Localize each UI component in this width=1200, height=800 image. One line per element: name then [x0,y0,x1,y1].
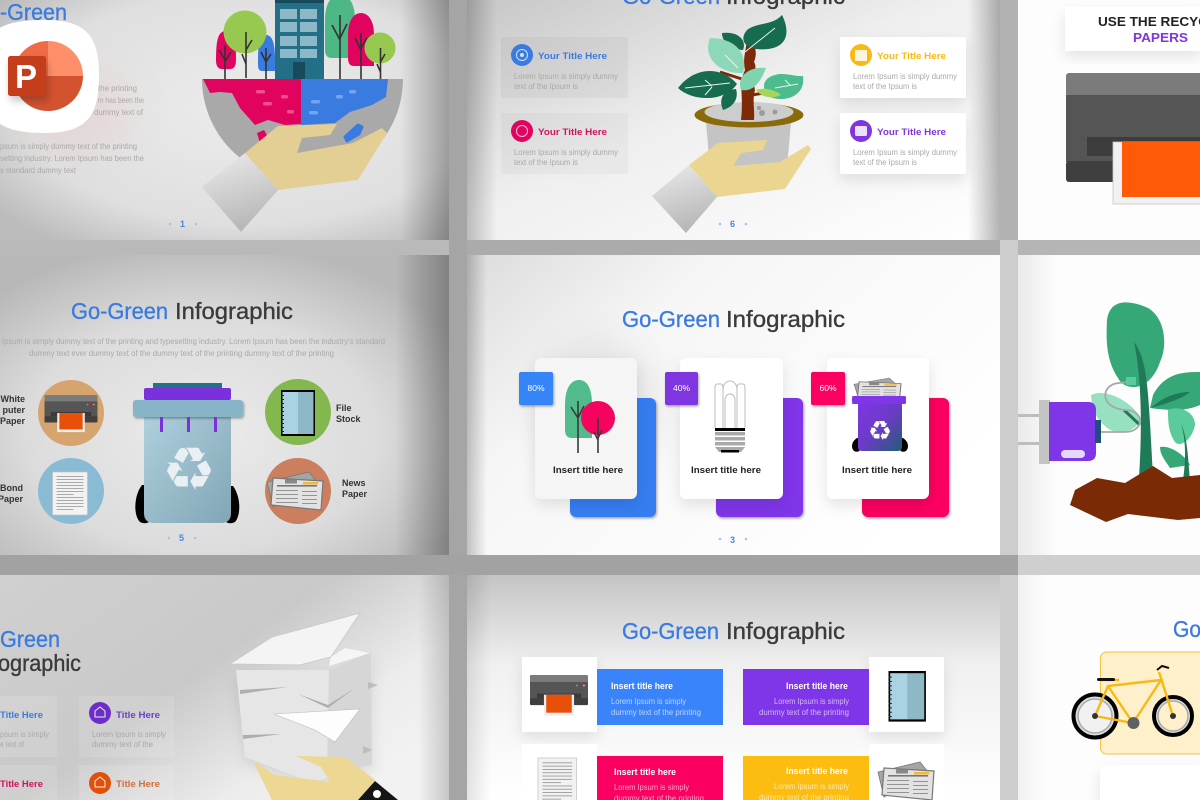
item: bond paper [0,458,104,524]
heading: Infographic [726,618,845,644]
panel: slide 3 percentage cards [467,255,1000,555]
card: blue title: e text of [0,740,25,749]
hand [689,140,811,197]
leaves [743,15,786,49]
card: purple title [840,113,966,174]
item: computer paper with printer [0,380,104,446]
item: computer paper with printer: puter [2,405,25,415]
block: newspaper, yellow: Lorem Ipsum is simply [774,782,849,791]
block: document, pink [522,744,723,800]
icon: printer [1066,73,1200,204]
card: blue title: Lorem Ipsum is simply dummy [514,72,618,81]
panel: slide 1 globe in hand [0,0,449,240]
item: file stock [265,379,362,445]
block: document, pink: Insert title here [614,767,676,777]
panel: right plant and plug slide [1018,255,1200,555]
heading: Green [0,626,60,652]
callout: recycled papers heading [1065,7,1200,51]
card: 40 percent: 40% [673,383,690,393]
heading: ographic [0,650,81,676]
pot [694,102,804,168]
block: notebook, purple: dummy text of the printing [759,708,849,717]
card: 80 percent: Insert title here [553,465,623,476]
body text: setting industry. Lorem Ipsum has been the [0,154,145,163]
card: blue title: text of the Ipsum is [514,82,578,91]
icon: purple bin with newspapers: ♻ [868,416,892,447]
card: yellow title: Lorem Ipsum is simply dummy [853,72,957,81]
card: pink title: Your Title Here [538,127,607,138]
block: notebook, purple [743,657,944,732]
card: 80 percent: 80% [527,383,545,393]
body text [0,84,145,175]
card: purple title: dummy text of the [92,740,154,749]
panel: slide 5 recycling bin [0,255,449,555]
card: pink title [0,765,57,800]
heading [622,618,845,644]
bin with recycle symbol: ♻ [162,435,216,505]
illustration: potted plant in hand [652,15,811,233]
body text: m has been the [98,96,144,105]
icon: trees [565,380,615,453]
card: yellow title: text of the Ipsum is [853,82,917,91]
card: blue title: Your Title Here [538,51,607,62]
card: purple title: Your Title Here [877,127,946,138]
page number: 1 [180,219,185,229]
icon: bicycle [1074,666,1192,738]
card: pink title: Lorem Ipsum is simply dummy [514,148,618,157]
card: yellow title: Your Title Here [877,51,946,62]
block: document, pink: Lorem Ipsum is simply [614,783,689,792]
callout: recycled papers heading: PAPERS [1133,30,1188,45]
heading: Go-Green [622,618,719,644]
page number: 5 [179,533,184,543]
item: news paper [265,458,368,524]
white card [1100,765,1200,800]
icon: purple bin with newspapers [852,378,908,452]
card: purple title: Lorem Ipsum is simply [92,730,166,739]
card: purple title [79,696,174,757]
page number [719,219,747,229]
globe [202,79,403,180]
panel: bottom-left paper stack slide [0,575,449,800]
heading [71,298,293,324]
heading: Infographic [726,306,845,332]
card: orange title: Title Here [116,779,160,790]
card: blue title: psum is simply [0,730,49,739]
block: printer, blue: Insert title here [611,681,673,691]
page number [719,535,747,545]
sleeve [202,153,278,232]
hand [245,124,387,190]
heading: Go-Green [622,306,720,332]
card: 60 percent [811,358,949,517]
card: pink title: Title Here [0,779,43,790]
item: news paper: News [342,478,366,488]
item: news paper: Paper [342,489,368,499]
body text [2,337,385,358]
card: purple title: Title Here [116,710,160,721]
body text: s standard dummy text [0,166,77,175]
heading: Go-Green [71,298,168,324]
body text: the printing [98,84,137,93]
page number [169,219,197,229]
item: bond paper: Bond [0,483,23,493]
block: printer, blue: dummy text of the printing [611,708,701,717]
page number [168,533,196,543]
heading [622,306,845,332]
sleeve [652,165,717,233]
card: blue title [501,37,628,98]
icon: PowerPoint app: P [15,58,37,95]
card: blue title [0,696,57,757]
card: 60 percent: 60% [819,383,837,393]
page number: 6 [730,219,735,229]
item: computer paper with printer: Paper [0,416,25,426]
item: computer paper with printer: White [0,394,25,404]
card: 60 percent: Insert title here [842,465,912,476]
block: notebook, purple: Lorem Ipsum is simply [774,697,849,706]
block: notebook, purple: Insert title here [786,681,848,691]
block: newspaper, yellow: Insert title here [786,766,848,776]
icon: light bulb [715,381,745,452]
trees [216,0,396,82]
panel: top-right printer slide [1018,0,1200,240]
card: yellow title [840,37,966,98]
body text: dummy text of [94,108,144,117]
soil [1070,466,1200,522]
item: file stock: Stock [336,414,362,424]
card: pink title: text of the Ipsum is [514,158,578,167]
card: 40 percent [665,358,803,517]
body text: dummy text ever dummy text of the dummy text of the printing dummy text of the printing [29,349,334,358]
icon: PowerPoint app [0,20,135,150]
hand [253,756,375,800]
bin with recycle symbol [133,383,243,523]
illustration: paper stack in hand [230,613,398,800]
illustration: trees and building on globe held by hand [202,0,403,232]
body text: Ipsum is simply dummy text of the printing and typesetting industry. Lorem Ipsum has been the industry's standard [2,337,385,346]
heading [622,0,845,9]
card: 40 percent: Insert title here [691,465,761,476]
block: printer, blue: Lorem Ipsum is simply [611,697,686,706]
card: blue title: Title Here [0,710,43,721]
block: newspaper, yellow [743,744,944,800]
card: purple title: Lorem Ipsum is simply dummy [853,148,957,157]
page number: 3 [730,535,735,545]
block: printer, blue [522,657,723,732]
sleeve [358,781,398,800]
card: pink title [501,113,628,174]
card: purple title: text of the Ipsum is [853,158,917,167]
card: orange title [79,765,174,800]
panel: bottom-center info blocks [467,575,1000,800]
panel: bottom-right bicycle slide [1018,575,1200,800]
yellow backdrop [1100,652,1200,754]
item: file stock: File [336,403,352,413]
heading: Infographic [175,298,293,324]
building [275,0,324,80]
card: 80 percent [519,358,656,517]
plant [1091,302,1200,480]
panel: slide 6 plant in hand [467,0,1000,240]
heading [0,626,81,676]
body text: psum is simply dummy text of the printing [0,142,137,151]
plug and cable [1018,377,1140,464]
trunk [741,36,756,120]
